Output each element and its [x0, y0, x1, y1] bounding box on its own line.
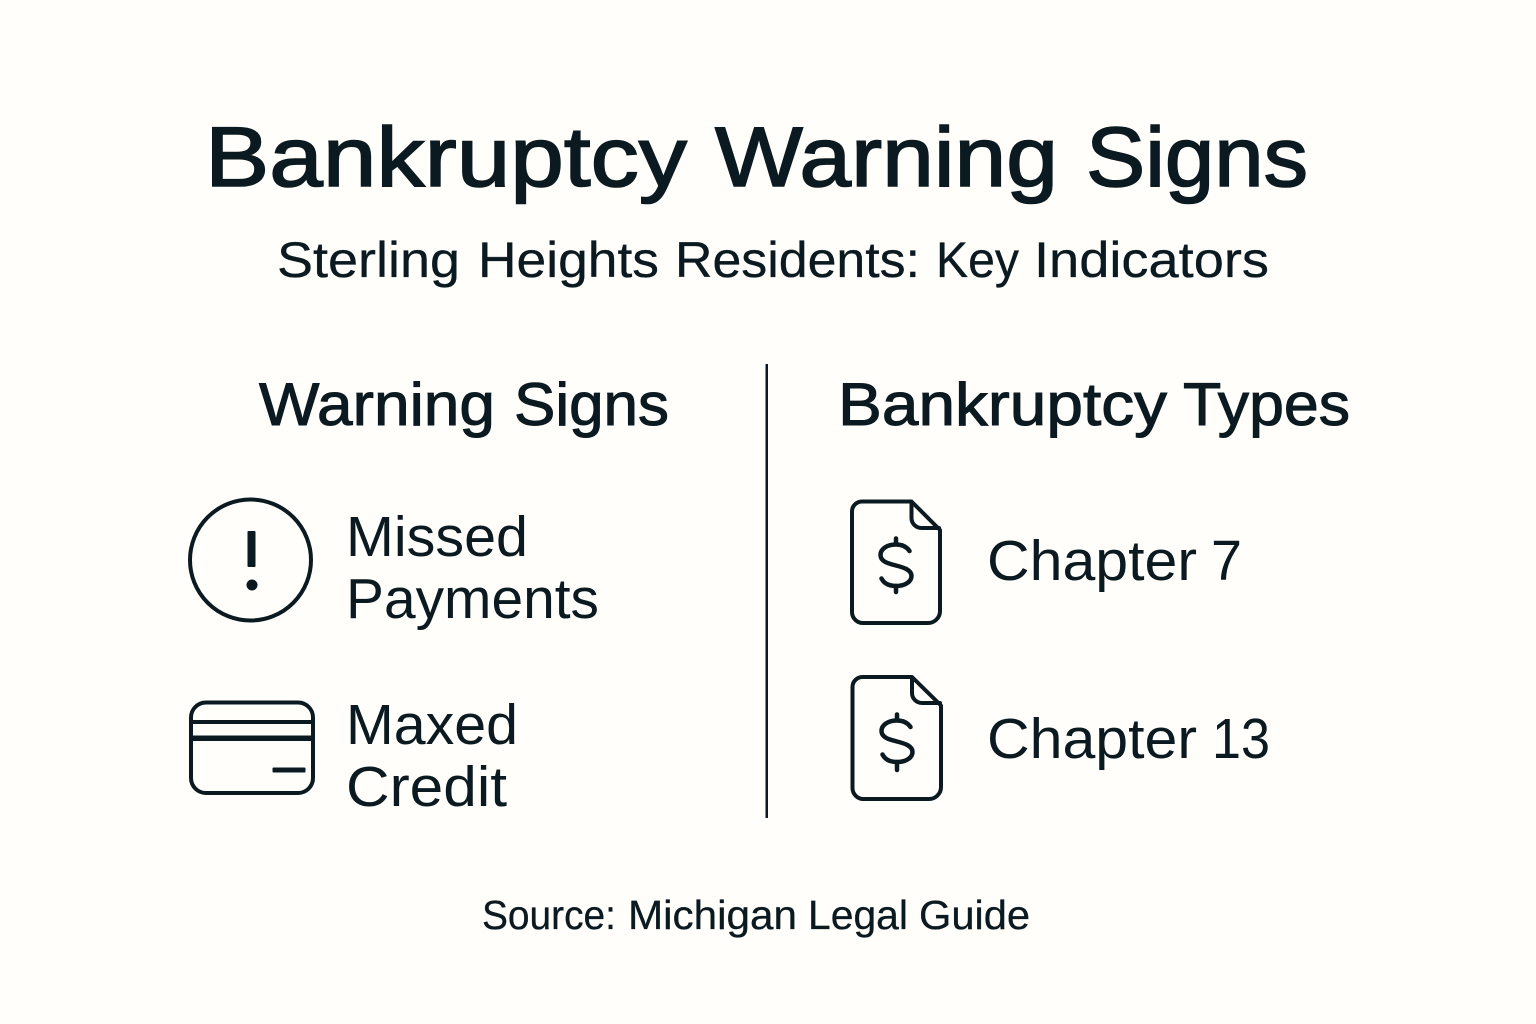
label: chapter 13: 13 [1212, 707, 1270, 771]
source note [482, 892, 1030, 938]
icon: document with dollar 2 [852, 677, 941, 799]
subtitle: Key [936, 232, 1019, 288]
label: missed: Missed [346, 505, 528, 569]
label: chapter 7: Chapter [987, 529, 1197, 593]
subtitle [277, 232, 1269, 288]
subtitle: Residents: [675, 232, 920, 288]
heading: bankruptcy types: Bankruptcy [838, 371, 1167, 438]
subtitle: Indicators [1034, 232, 1269, 288]
panel: bankruptcy types [838, 371, 1350, 799]
source note: Michigan [628, 892, 797, 938]
subtitle: Heights [478, 232, 659, 288]
title: Signs [1086, 110, 1308, 204]
label: maxed: Maxed [346, 693, 518, 757]
heading: warning signs: Warning [259, 371, 495, 438]
source note: Legal [808, 892, 908, 938]
heading: warning signs [259, 371, 669, 438]
title: Warning [715, 110, 1058, 204]
heading: bankruptcy types: Types [1183, 371, 1350, 438]
source note: Source: [482, 892, 616, 938]
label: chapter 7: 7 [1211, 529, 1242, 593]
heading: warning signs: Signs [514, 371, 669, 438]
source note: Guide [919, 892, 1030, 938]
heading: bankruptcy types [838, 371, 1350, 438]
icon: document with dollar 1 [852, 502, 940, 623]
label: chapter 13: Chapter [987, 707, 1197, 771]
center divider [766, 364, 768, 818]
title [205, 110, 1308, 204]
panel: warning signs [190, 371, 669, 819]
subtitle: Sterling [277, 232, 460, 288]
icon: exclamation circle [190, 500, 311, 620]
icon: credit card [191, 702, 313, 793]
label: credit: Credit [346, 755, 507, 819]
title: Bankruptcy [205, 110, 687, 204]
label: payments: Payments [346, 567, 599, 631]
